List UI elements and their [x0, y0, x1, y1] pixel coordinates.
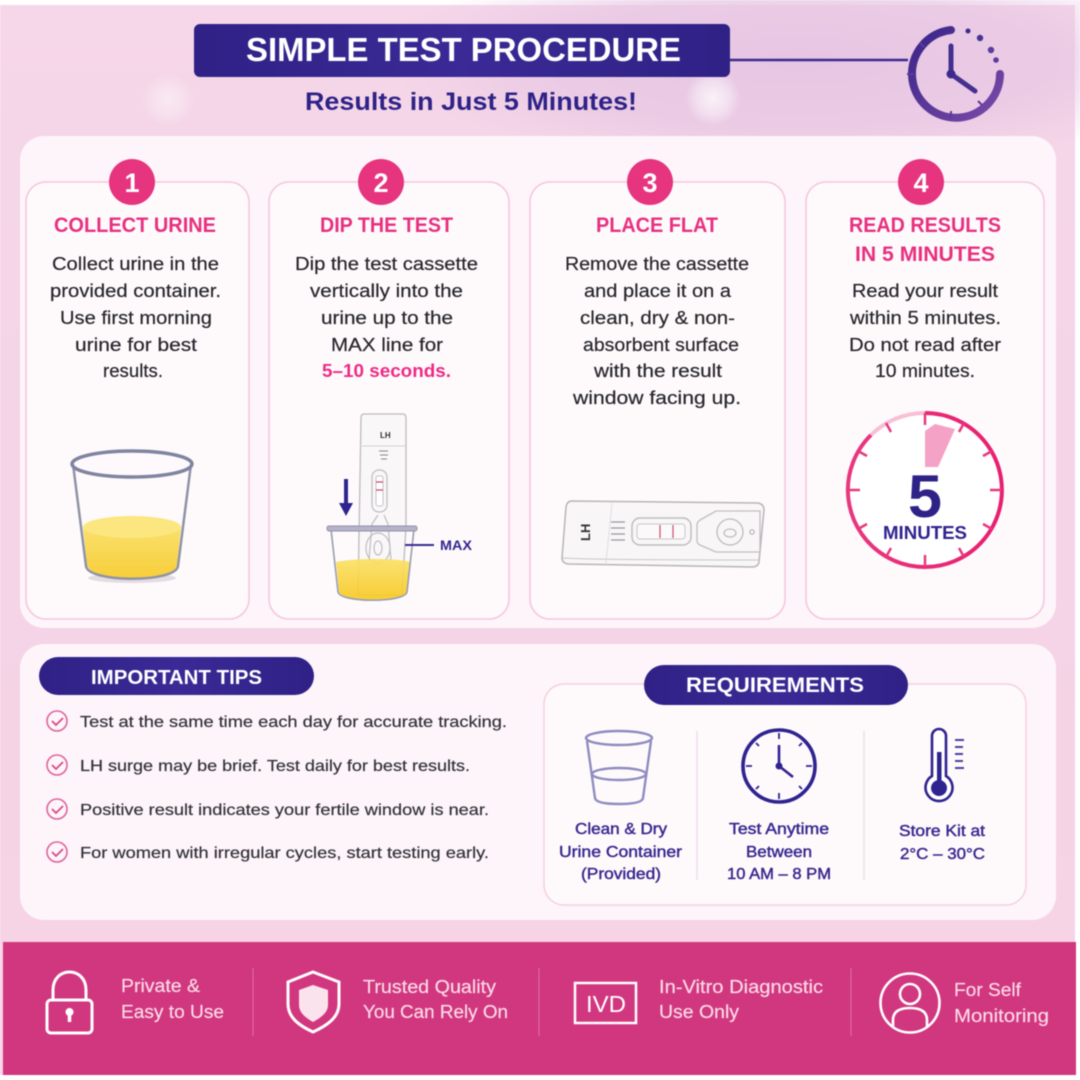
- panel: steps: [20, 136, 1056, 628]
- step 4 card: 4: [913, 168, 929, 198]
- step 4 card: [806, 159, 1044, 619]
- text: in-vitro: Use Only: [659, 1002, 739, 1022]
- step 4 card: Do not read after: [849, 334, 1001, 355]
- step 1 card: Use first morning: [60, 307, 212, 328]
- icon: container: [586, 731, 652, 804]
- step 1 card: COLLECT URINE: [54, 214, 216, 237]
- step 1 card: urine for best: [75, 334, 197, 355]
- timer: 5 minutes: MINUTES: [883, 523, 967, 543]
- step 3 card: 3: [642, 168, 658, 198]
- icon: IVD: IVD: [586, 991, 626, 1017]
- text: trusted: [363, 977, 508, 1022]
- MAX marker: MAX: [440, 537, 473, 553]
- step 4 card: READ RESULTS: [849, 214, 1001, 237]
- text: self monitoring: For Self: [954, 980, 1022, 1000]
- step 2 card: DIP THE TEST: [320, 214, 453, 237]
- step 3 card: [530, 159, 785, 619]
- MAX marker: [405, 537, 473, 553]
- subtitle: Results in Just 5 Minutes!: [305, 88, 637, 116]
- clock icon with connector: [730, 28, 1000, 118]
- requirement text: time: Test Anytime: [729, 821, 829, 838]
- illustration: cassette lying flat: LH: [578, 524, 593, 541]
- text: self monitoring: [954, 980, 1049, 1026]
- step 4 card: within 5 minutes.: [849, 307, 1001, 328]
- requirements heading: [644, 665, 908, 705]
- step 3 card: PLACE FLAT: [596, 214, 718, 237]
- tip 1: [47, 711, 507, 731]
- text: private: Private &: [121, 976, 200, 996]
- requirements: [544, 665, 1026, 905]
- tip 4: [47, 842, 489, 862]
- illustration: cassette dipped in cup: [327, 414, 417, 600]
- requirements: (Provided): [581, 866, 661, 883]
- step 3 card: Remove the cassette: [565, 253, 749, 274]
- step 1 card: results.: [103, 360, 163, 381]
- step 2 card: [269, 159, 509, 619]
- requirements: 10 AM – 8 PM: [727, 866, 831, 883]
- tip 4: For women with irregular cycles, start testing early.: [80, 845, 489, 862]
- requirements heading: REQUIREMENTS: [686, 674, 864, 697]
- step 3 card: with the result: [593, 360, 722, 381]
- step 2 card: 2: [373, 168, 389, 198]
- step 2 card: vertically into the: [310, 280, 463, 301]
- step 1 card: 1: [124, 168, 140, 198]
- panel: tips and requirements: [20, 644, 1056, 920]
- requirement text: container: Clean & Dry: [575, 821, 667, 838]
- arrow: dip down: [339, 479, 353, 516]
- requirement text: storage: Store Kit at: [899, 823, 986, 840]
- text: private: [121, 976, 224, 1022]
- text: private: Easy to Use: [121, 1002, 224, 1022]
- timer: 5 minutes: 5: [908, 463, 942, 530]
- step 3 card: clean, dry & non-: [580, 307, 735, 328]
- tip 2: [47, 755, 470, 775]
- step 4 card: IN 5 MINUTES: [855, 243, 995, 266]
- footer band: [3, 942, 1076, 1075]
- title banner: [194, 24, 730, 77]
- icon: thermometer: [926, 729, 964, 801]
- text: in-vitro: In-Vitro Diagnostic: [659, 977, 823, 997]
- tip 3: [47, 799, 489, 819]
- illustration: cassette dipped in cup: LH: [380, 431, 391, 440]
- important tips: [39, 657, 507, 862]
- tips heading: IMPORTANT TIPS: [91, 667, 262, 689]
- step 4 card: 10 minutes.: [875, 360, 975, 381]
- step 2 card: urine up to the: [321, 307, 453, 328]
- timer: 5 minutes: [848, 413, 1002, 567]
- icon: lock: [47, 972, 92, 1033]
- text: self monitoring: Monitoring: [954, 1006, 1049, 1026]
- text: trusted: Trusted Quality: [363, 977, 496, 997]
- step 4 card: Read your result: [852, 280, 998, 301]
- tip 3: Positive result indicates your fertile window is near.: [80, 802, 489, 819]
- text: trusted: You Can Rely On: [363, 1002, 508, 1022]
- icon: IVD: [575, 983, 636, 1023]
- step 2 card: MAX line for: [331, 334, 443, 355]
- step 2 card: 5–10 seconds.: [322, 360, 451, 381]
- tips heading: [39, 657, 314, 695]
- illustration: cassette lying flat: [562, 501, 764, 567]
- step 1 card: provided container.: [50, 280, 221, 301]
- requirements: 2°C – 30°C: [900, 846, 985, 863]
- step 3 card: window facing up.: [572, 387, 741, 408]
- tip 2: LH surge may be brief. Test daily for best results.: [80, 758, 470, 775]
- step 3 card: and place it on a: [584, 280, 732, 301]
- step 1 card: Collect urine in the: [52, 253, 219, 274]
- step 3 card: absorbent surface: [583, 334, 739, 355]
- icon: person: [880, 974, 940, 1032]
- icon: clock: [743, 730, 815, 802]
- requirements: Urine Container: [559, 844, 683, 861]
- icon: shield: [288, 972, 339, 1032]
- text: in-vitro: [659, 977, 823, 1022]
- step 1 card: [26, 159, 249, 619]
- requirements: Between: [746, 844, 812, 861]
- tip 1: Test at the same time each day for accurate tracking.: [80, 714, 507, 731]
- title banner: SIMPLE TEST PROCEDURE: [246, 31, 681, 68]
- icon: urine cup: [72, 451, 192, 583]
- step 2 card: Dip the test cassette: [295, 253, 478, 274]
